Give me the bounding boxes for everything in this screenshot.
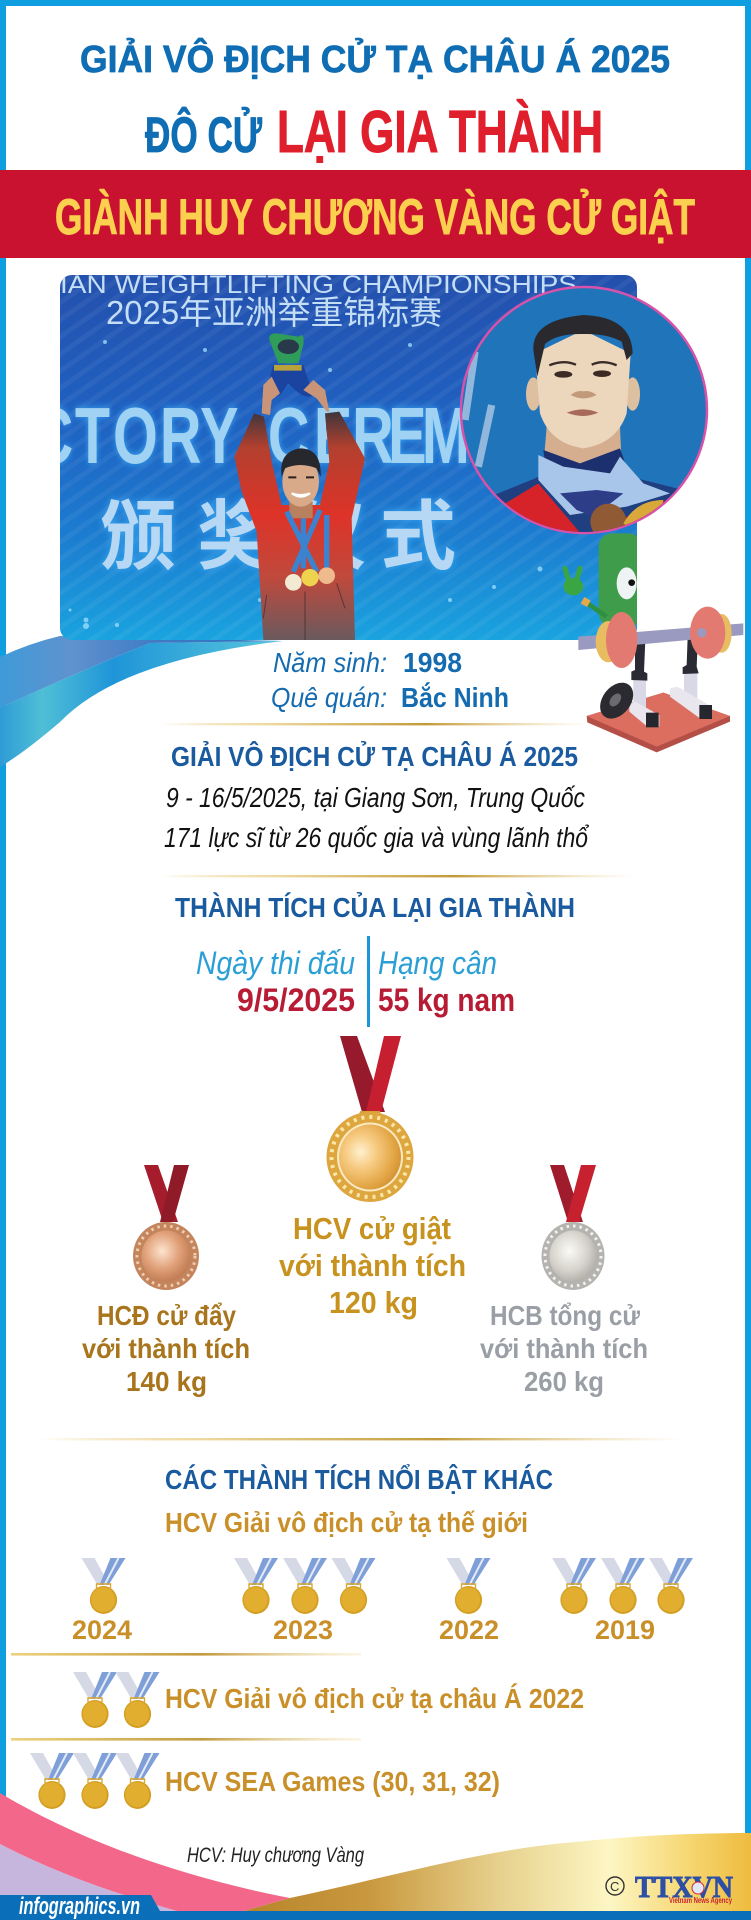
eyebrows bbox=[549, 362, 617, 365]
decorative blue ribbon bbox=[0, 636, 283, 767]
screen text: 2025年亚洲举重锦标赛 bbox=[106, 294, 442, 331]
world championships heading: HCV Giải vô địch cử tạ thế giới bbox=[165, 1507, 528, 1538]
loose plate bbox=[593, 676, 640, 725]
lanyards bbox=[287, 510, 327, 572]
footer blue bar bbox=[0, 1893, 751, 1920]
silver medal caption: với thành tích bbox=[480, 1333, 648, 1364]
achievements section bbox=[175, 891, 575, 1027]
year labels: 2024 bbox=[72, 1615, 132, 1645]
other achievements heading: CÁC THÀNH TÍCH NỔI BẬT KHÁC bbox=[165, 1464, 553, 1495]
ceremony chinese text: 颁奖仪式 bbox=[100, 495, 456, 580]
footnote: HCV: Huy chương Vàng bbox=[187, 1844, 364, 1867]
athlete info: 1998 bbox=[403, 647, 462, 678]
silver medal caption: 260 kg bbox=[524, 1366, 604, 1397]
screen text bbox=[62, 275, 576, 328]
footer gold swoosh bbox=[244, 1833, 751, 1911]
mouth bbox=[567, 409, 598, 416]
athlete name: LẠI GIA THÀNH bbox=[277, 99, 603, 165]
bronze medal caption: 140 kg bbox=[126, 1366, 207, 1397]
achievements section: 55 kg nam bbox=[378, 982, 515, 1018]
icons: world medals 2023 bbox=[234, 1558, 376, 1614]
year labels: 2023 bbox=[273, 1615, 333, 1645]
icons: SEA Games medals bbox=[30, 1753, 160, 1809]
gold medal bbox=[623, 500, 664, 525]
shoulders bbox=[496, 477, 678, 532]
collar bbox=[543, 448, 625, 474]
footer blue bar: infographics.vn bbox=[19, 1893, 140, 1920]
background ropes bbox=[465, 352, 492, 467]
athlete info: Bắc Ninh bbox=[401, 682, 509, 713]
nose bbox=[571, 391, 597, 398]
glitter dots bbox=[68, 340, 542, 629]
ceremony text: CTORY CEREM bbox=[32, 391, 470, 480]
icons: world medals 2024 bbox=[82, 1558, 126, 1614]
ears bbox=[526, 377, 541, 411]
icon: silver medal bbox=[542, 1165, 604, 1290]
arms and jacket bbox=[234, 412, 365, 640]
tournament heading: GIẢI VÔ ĐỊCH CỬ TẠ CHÂU Á 2025 bbox=[171, 740, 578, 772]
bronze medal caption: HCĐ cử đẩy bbox=[97, 1300, 236, 1331]
gold medal caption: với thành tích bbox=[279, 1248, 466, 1283]
year labels bbox=[72, 1615, 655, 1645]
victory ceremony photo bbox=[32, 271, 642, 640]
mascot bbox=[563, 533, 642, 627]
title line 1: GIẢI VÔ ĐỊCH CỬ TẠ CHÂU Á 2025 bbox=[80, 36, 670, 81]
TTXVN logo bbox=[606, 1869, 733, 1905]
left plates bbox=[596, 621, 621, 662]
bronze medal caption bbox=[82, 1300, 250, 1397]
weight class: Hạng cân bbox=[378, 945, 497, 981]
neck bbox=[289, 502, 313, 518]
trophy bbox=[269, 333, 304, 363]
title line 2 prefix: ĐÔ CỬ bbox=[145, 106, 262, 163]
footer pink and lavender swoosh bbox=[0, 1793, 290, 1920]
year labels: 2019 bbox=[595, 1615, 655, 1645]
SEA Games label: HCV SEA Games (30, 31, 32) bbox=[165, 1766, 500, 1797]
neck bbox=[543, 427, 622, 467]
competition date: Ngày thi đấu bbox=[196, 945, 355, 981]
athlete info bbox=[271, 647, 509, 713]
silver medal caption: HCB tổng cử bbox=[490, 1300, 641, 1331]
hands bbox=[262, 377, 280, 415]
year labels: 2022 bbox=[439, 1615, 499, 1645]
hometown: Quê quán: bbox=[271, 682, 387, 713]
icon: gold medal bbox=[326, 1036, 414, 1202]
TTXVN logo: C bbox=[610, 1879, 619, 1894]
portrait circle bbox=[461, 287, 707, 553]
hair bbox=[533, 315, 633, 377]
eyes bbox=[554, 371, 572, 378]
birth year: Năm sinh: bbox=[273, 647, 387, 678]
jacket zip bbox=[263, 583, 345, 640]
bronze medal caption: với thành tích bbox=[82, 1333, 250, 1364]
screen text: IAN WEIGHTLIFTING CHAMPIONSHIPS bbox=[60, 271, 577, 299]
red banner bbox=[0, 170, 751, 258]
achievements heading: THÀNH TÍCH CỦA LẠI GIA THÀNH bbox=[175, 891, 575, 923]
silver medal caption bbox=[480, 1300, 648, 1397]
face bbox=[535, 330, 631, 448]
bronze medal bbox=[590, 504, 626, 532]
icons: world medals 2022 bbox=[446, 1558, 490, 1614]
TTXVN logo: TTXVN bbox=[635, 1869, 733, 1904]
title block bbox=[80, 36, 670, 165]
head bbox=[282, 465, 319, 507]
asian championship label: HCV Giải vô địch cử tạ châu Á 2022 bbox=[165, 1683, 584, 1714]
icons: asian championship medals bbox=[73, 1672, 160, 1728]
gold medal caption: HCV cử giật bbox=[293, 1211, 451, 1246]
gold medal caption: 120 kg bbox=[329, 1285, 418, 1320]
icon: bronze medal bbox=[133, 1165, 199, 1290]
icons: world medals 2019 bbox=[552, 1558, 693, 1614]
bar bbox=[578, 623, 743, 650]
athlete on podium bbox=[234, 333, 365, 640]
athletes count: 171 lực sĩ từ 26 quốc gia và vùng lãnh thổ bbox=[164, 822, 589, 853]
gold medal caption bbox=[279, 1211, 466, 1320]
icon: barbell bbox=[578, 607, 743, 752]
tournament section bbox=[164, 740, 589, 853]
tournament dates: 9 - 16/5/2025, tại Giang Sơn, Trung Quốc bbox=[166, 782, 585, 813]
right plates bbox=[712, 614, 732, 653]
uprights bbox=[633, 678, 646, 710]
base bbox=[587, 693, 730, 752]
medals bbox=[285, 574, 302, 591]
achievements section: 9/5/2025 bbox=[237, 982, 355, 1018]
lanyard bbox=[538, 455, 670, 515]
